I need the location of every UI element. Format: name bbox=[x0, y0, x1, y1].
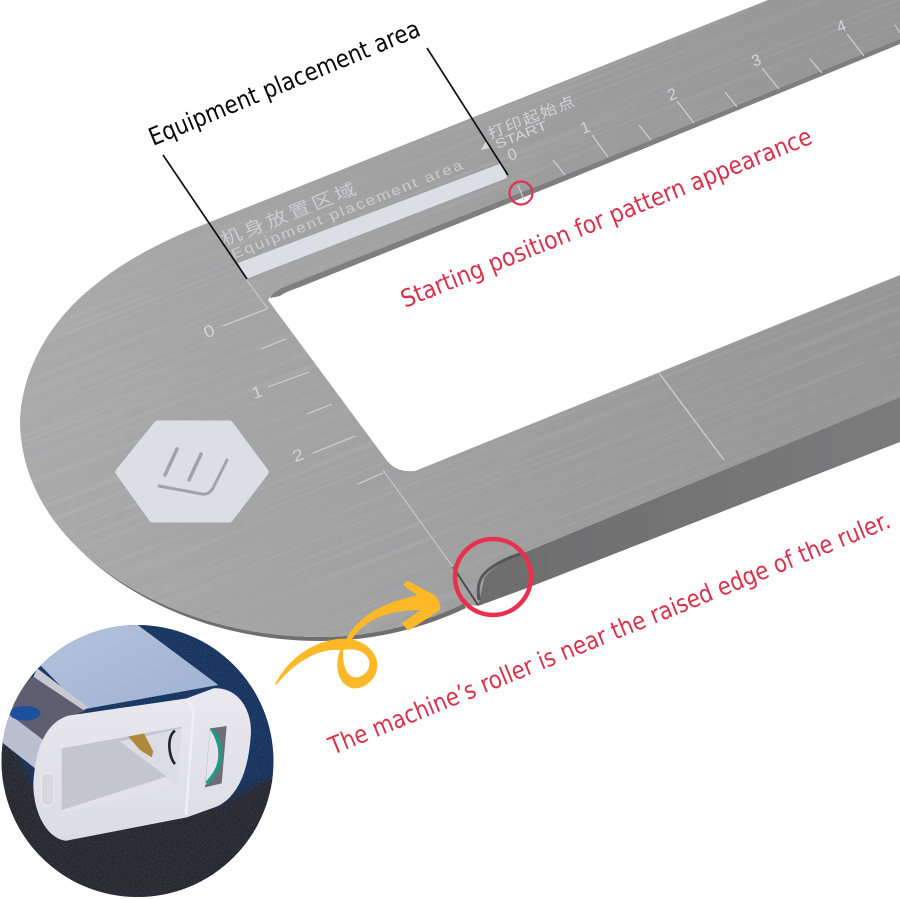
dark o-ring bbox=[169, 731, 175, 764]
start label: 打印起始点 bbox=[485, 93, 577, 142]
left scale numbers: 1 bbox=[249, 382, 265, 402]
top scale numbers: 3 bbox=[749, 52, 764, 71]
yellow curly arrow bbox=[275, 581, 440, 688]
left scale ticks bbox=[223, 309, 383, 484]
large red circle marker bbox=[455, 539, 531, 615]
ruler bottom edge thickness bbox=[75, 38, 900, 641]
small red circle marker bbox=[510, 182, 532, 204]
equipment placement etched label: 机身放置区域 bbox=[218, 178, 363, 250]
gold contacts bbox=[128, 733, 153, 757]
cap window bbox=[62, 727, 182, 810]
raised side face of ruler bbox=[478, 397, 900, 606]
callout: starting position: Starting position for pattern appearance bbox=[396, 121, 816, 314]
start label: START bbox=[493, 117, 550, 152]
left scale numbers: 2 bbox=[290, 445, 306, 465]
left scale numbers bbox=[201, 321, 306, 465]
top scale ticks bbox=[518, 25, 900, 200]
ruler plate bbox=[20, 0, 900, 641]
heading: equipment placement area: Equipment placement area bbox=[144, 14, 424, 152]
photo background bbox=[0, 625, 290, 899]
brand logo hexagon bbox=[120, 425, 264, 518]
top scale numbers: 2 bbox=[665, 86, 680, 105]
start marker triangle bbox=[481, 139, 490, 150]
roller disc bbox=[205, 729, 218, 785]
top scale numbers: 1 bbox=[578, 119, 593, 138]
brushed metal texture bbox=[459, 154, 698, 366]
crease lines bbox=[246, 279, 724, 605]
leader line left bbox=[163, 155, 247, 279]
cap divider ridge bbox=[186, 700, 193, 815]
side tab bbox=[42, 773, 54, 805]
top scale numbers: 4 bbox=[834, 18, 849, 37]
green roller bbox=[207, 729, 221, 783]
device body top bbox=[40, 622, 218, 709]
top scale numbers: 0 bbox=[505, 146, 520, 165]
leader line right bbox=[427, 48, 508, 175]
dark table surface bbox=[0, 625, 290, 899]
circular product photo bbox=[0, 622, 290, 899]
white cap bbox=[33, 688, 251, 841]
blue logo spot bbox=[10, 706, 40, 721]
device side bbox=[2, 676, 86, 744]
roller slot bbox=[205, 726, 227, 787]
top scale numbers bbox=[505, 18, 849, 165]
ruler top surface bbox=[20, 0, 900, 637]
equipment placement strip bbox=[238, 163, 507, 279]
photo contents, zoom coordinates bbox=[0, 622, 251, 841]
raised edge dark curve bbox=[478, 553, 523, 600]
left scale numbers: 0 bbox=[201, 321, 218, 341]
equipment placement etched label: Equipment placement area bbox=[229, 158, 466, 262]
